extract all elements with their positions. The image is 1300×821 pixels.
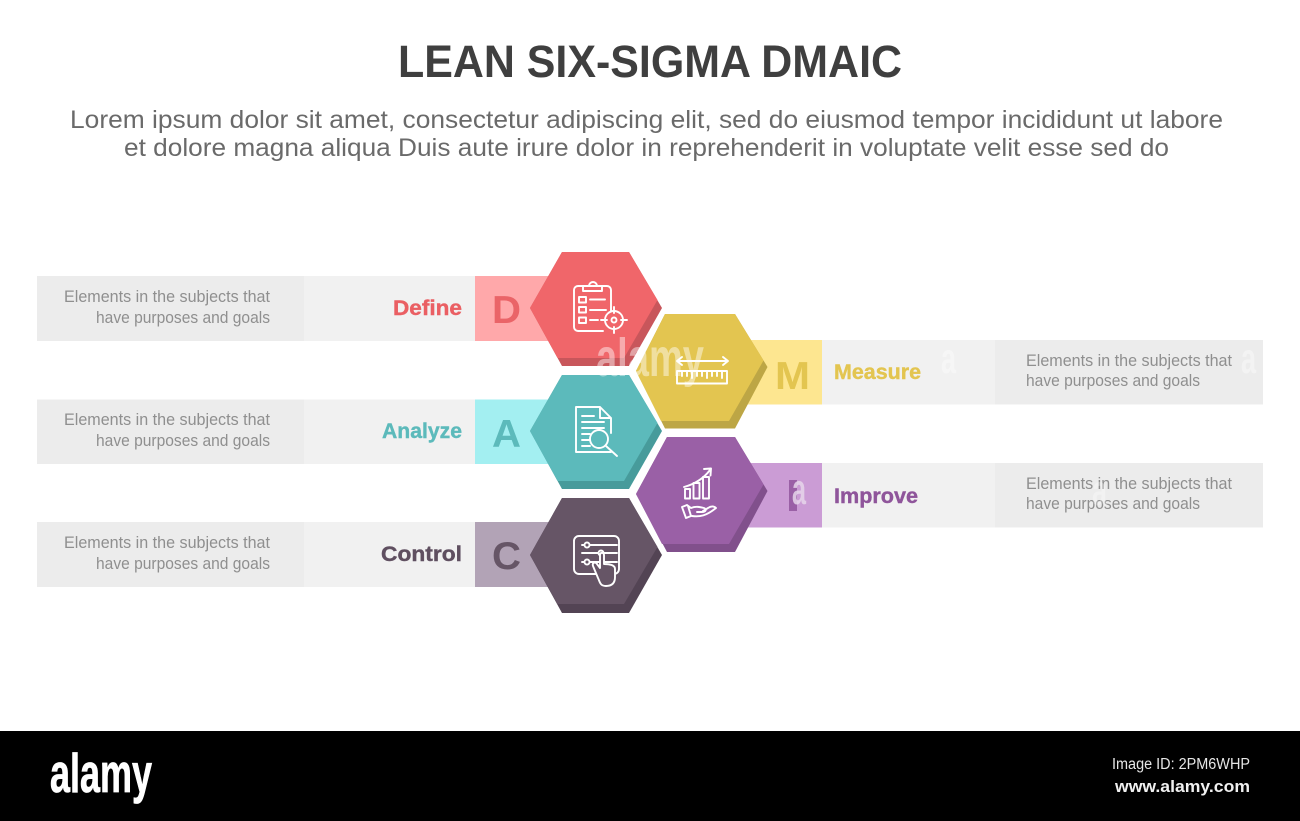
description: Analyze: Elements in the subjects that <box>64 411 270 429</box>
label: Control: Control <box>381 543 462 566</box>
icon: ruler with arrow <box>677 357 728 384</box>
description: Analyze <box>64 411 270 450</box>
title: LEAN SIX-SIGMA DMAIC <box>398 36 902 87</box>
description: Improve <box>1026 475 1232 513</box>
label: Analyze: Analyze <box>382 420 462 443</box>
icon: growth chart in hand <box>682 468 716 518</box>
letter: D: D <box>492 289 521 332</box>
description: Improve: have purposes and goals <box>1026 495 1200 513</box>
description: Define: have purposes and goals <box>96 309 270 327</box>
label: Improve: Improve <box>834 485 918 508</box>
description: Control <box>64 534 270 573</box>
subtitle text: et dolore magna aliqua Duis aute irure dolor in reprehenderit in voluptate velit esse sed do <box>124 134 1169 162</box>
row: Analyze <box>37 400 560 464</box>
website: www.alamy.com <box>1114 777 1250 796</box>
letter: I <box>789 480 797 511</box>
footer logo: alamy <box>50 742 152 804</box>
description: Define <box>64 288 270 327</box>
watermark: small marks: a <box>1092 467 1108 515</box>
hexagon: Measure <box>636 314 768 428</box>
letter: C: C <box>492 535 521 578</box>
row: Define <box>37 276 560 341</box>
watermark: small marks: a <box>792 466 807 514</box>
icon: clipboard with target <box>574 282 627 333</box>
watermark: centre logo: alamy <box>596 328 704 388</box>
label: Define: Define <box>393 297 462 320</box>
icon: document with magnifier <box>576 407 617 456</box>
row: Control <box>37 522 560 587</box>
letter: M: M <box>775 355 810 398</box>
watermark: small marks: a <box>941 335 957 383</box>
description: Measure <box>1026 352 1232 390</box>
description: Analyze: have purposes and goals <box>96 432 270 450</box>
row: Measure <box>740 340 1263 404</box>
description: Control: Elements in the subjects that <box>64 534 270 552</box>
footer bar <box>0 731 1300 821</box>
letter: A: A <box>492 413 521 456</box>
icon: touch control panel <box>574 536 619 586</box>
hexagon: Define <box>530 252 662 366</box>
subtitle text <box>70 106 1223 162</box>
description: Measure: have purposes and goals <box>1026 372 1200 390</box>
hexagon: Improve <box>636 437 768 552</box>
label: Measure: Measure <box>834 361 921 384</box>
subtitle text: Lorem ipsum dolor sit amet, consectetur adipiscing elit, sed do eiusmod tempor incididunt ut labore <box>70 106 1223 134</box>
row: Improve <box>740 463 1263 528</box>
hexagon: Control <box>530 498 662 613</box>
watermark: small marks <box>792 335 1257 515</box>
description: Improve: Elements in the subjects that <box>1026 475 1232 493</box>
description: Define: Elements in the subjects that <box>64 288 270 306</box>
description: Control: have purposes and goals <box>96 555 270 573</box>
watermark: small marks: a <box>1241 335 1257 383</box>
description: Measure: Elements in the subjects that <box>1026 352 1232 370</box>
hexagon: Analyze <box>530 375 662 489</box>
image id: Image ID: 2PM6WHP <box>1112 756 1250 773</box>
